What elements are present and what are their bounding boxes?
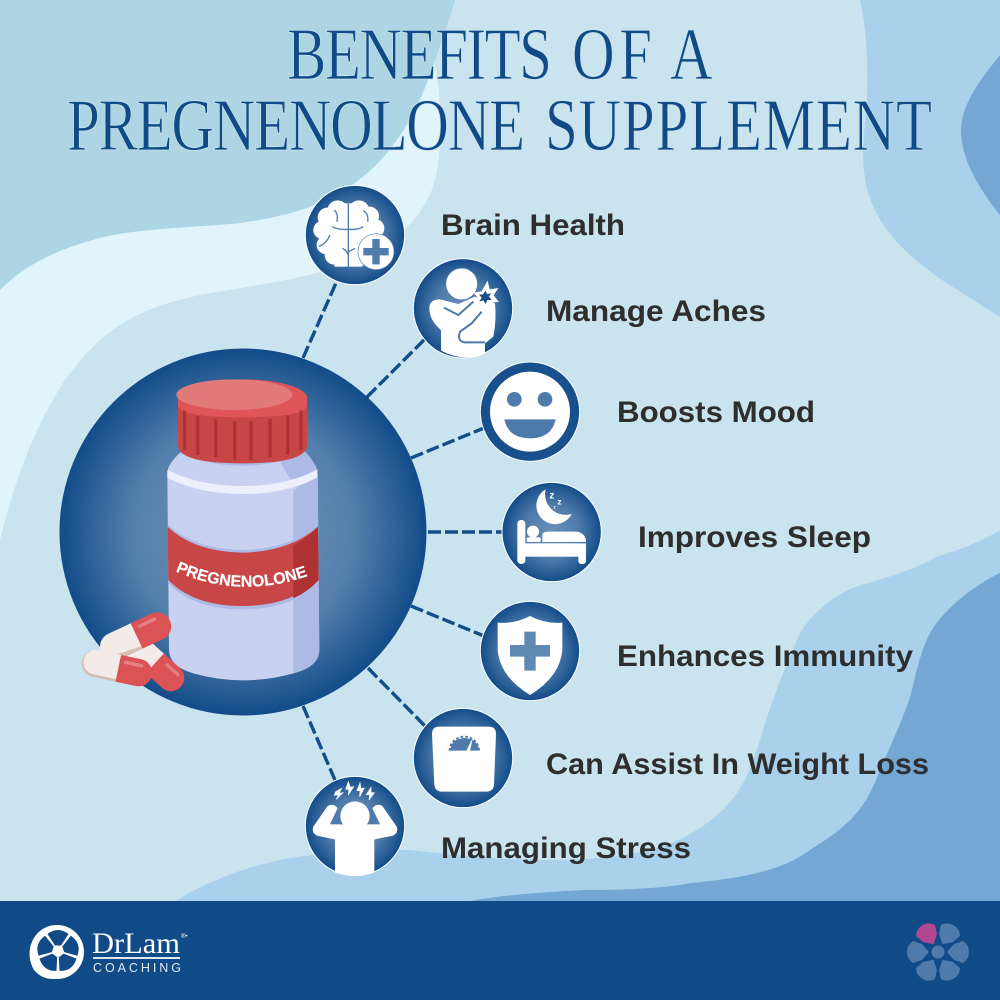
logo subtitle: COACHING bbox=[93, 961, 181, 975]
title: SUPPLEMENT bbox=[545, 84, 932, 167]
icon: weight scale bbox=[413, 708, 513, 808]
flower emblem bbox=[907, 920, 969, 984]
bottle label text: PREGNENOLONE bbox=[176, 562, 308, 587]
icon: manage aches bbox=[413, 259, 513, 358]
registered mark: ®• bbox=[181, 933, 188, 940]
background wave: top right bbox=[860, 0, 1000, 317]
icon: improves sleep: z bbox=[557, 496, 562, 506]
title: A bbox=[670, 13, 713, 96]
footer bar bbox=[0, 901, 1000, 1000]
label: improves sleep: Improves Sleep bbox=[638, 521, 871, 554]
logo: DrLam Coaching bbox=[30, 925, 188, 979]
background wave: bottom light bbox=[177, 530, 1000, 905]
title: OF bbox=[572, 13, 652, 96]
bottle cap bbox=[176, 379, 307, 463]
icon: improves sleep: z bbox=[553, 504, 556, 510]
label: boosts mood: Boosts Mood bbox=[617, 396, 815, 429]
label: manage aches: Manage Aches bbox=[546, 295, 766, 328]
icon: enhances immunity bbox=[480, 601, 580, 701]
background wave: light bbox=[0, 58, 440, 540]
icon: boosts mood bbox=[480, 362, 580, 461]
logo mark bbox=[30, 925, 84, 979]
label: weight loss: Can Assist In Weight Loss bbox=[546, 748, 929, 781]
background wave: dark top left bbox=[0, 0, 455, 290]
label: managing stress: Managing Stress bbox=[441, 832, 691, 865]
capsules bbox=[79, 608, 190, 697]
icon: brain health bbox=[305, 185, 405, 285]
title: BENEFITS bbox=[287, 13, 552, 96]
icon: improves sleep bbox=[502, 482, 601, 582]
icon: improves sleep: z bbox=[549, 490, 554, 501]
icon: managing stress bbox=[305, 776, 405, 876]
title bbox=[67, 13, 932, 167]
bottle bbox=[167, 379, 320, 680]
label: enhances immunity: Enhances Immunity bbox=[617, 640, 913, 673]
logo wordmark: DrLam bbox=[92, 927, 180, 960]
title: PREGNENOLONE bbox=[67, 84, 525, 167]
label: brain health: Brain Health bbox=[441, 209, 625, 242]
main circle bbox=[60, 348, 426, 716]
dashed connector lines bbox=[303, 283, 503, 780]
background blob: right edge bbox=[961, 55, 1000, 215]
background wave: bottom dark bbox=[464, 573, 1000, 905]
